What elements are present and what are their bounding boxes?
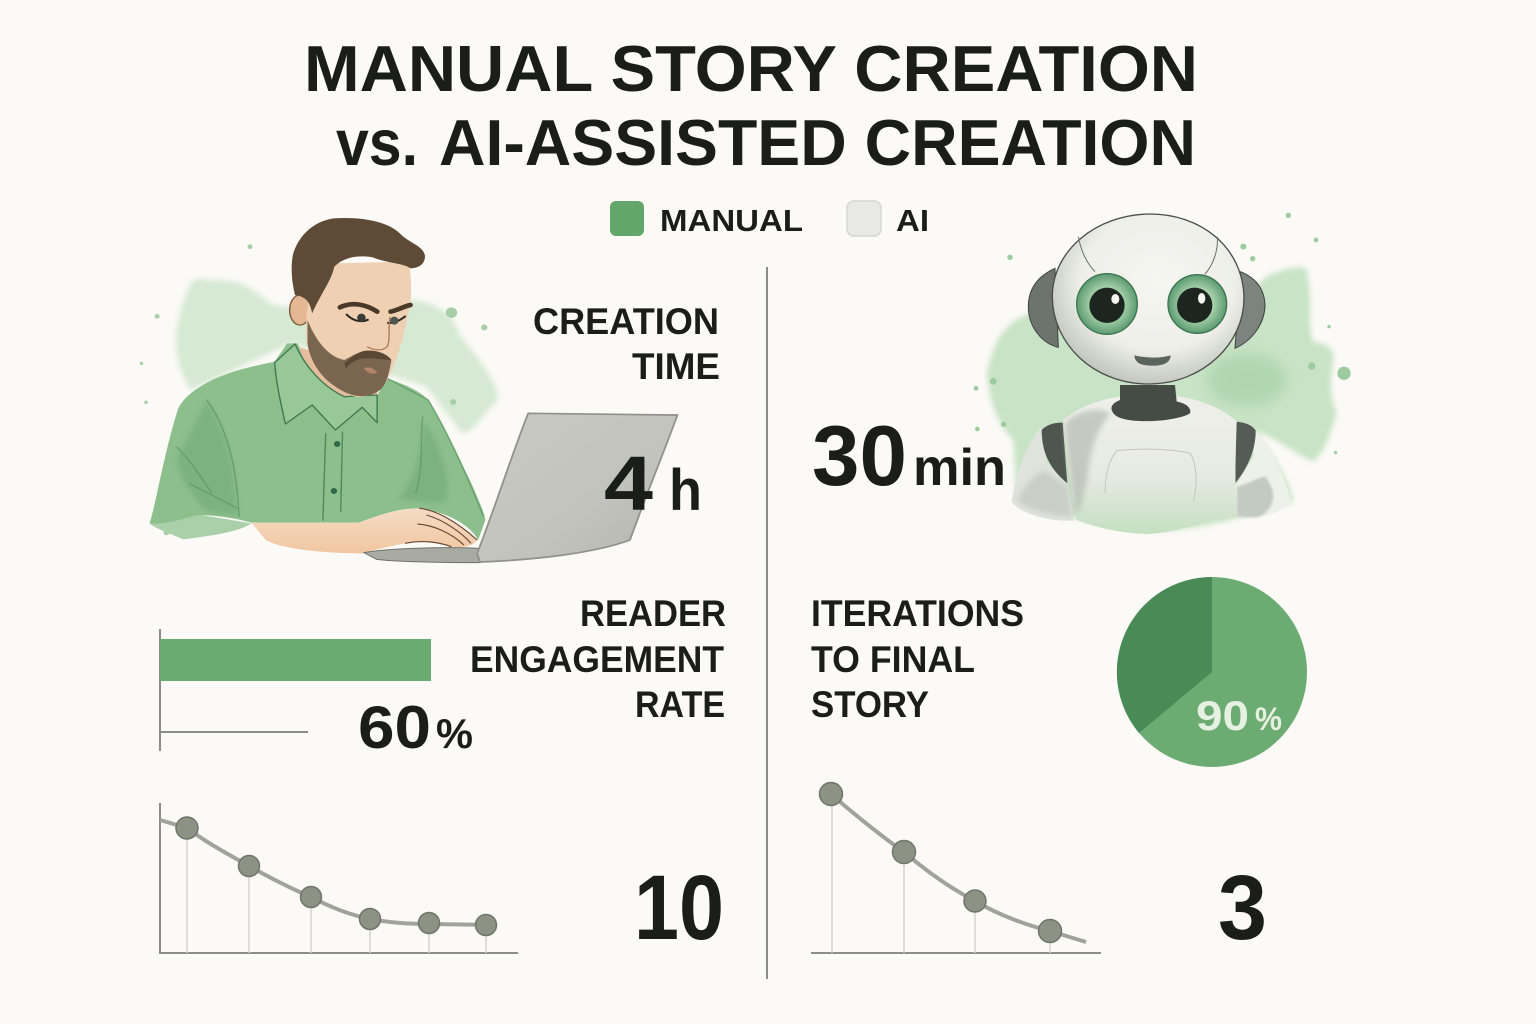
ear — [290, 295, 310, 325]
value: 30 min — [812, 409, 1006, 504]
shirt shading — [176, 400, 448, 517]
value: 60% — [358, 694, 473, 761]
axis — [159, 629, 161, 751]
label: iterations to final story — [811, 593, 1024, 725]
beard — [307, 320, 391, 396]
value: 60%: % — [436, 710, 473, 757]
right arm shading — [1237, 477, 1273, 517]
pie chart: 90%: % — [1255, 701, 1282, 737]
right arm — [1235, 430, 1292, 518]
legend label: AI: AI — [896, 203, 929, 238]
label: iterations to final story: ITERATIONS — [811, 593, 1024, 634]
laptop base — [364, 548, 480, 563]
label: reader engagement rate — [470, 593, 726, 725]
label: reader engagement rate: ENGAGEMENT — [470, 639, 724, 680]
title — [304, 32, 1198, 179]
bar chart: engagement — [159, 629, 431, 751]
value: 60%: 60 — [358, 694, 431, 761]
right shoulder joint — [1235, 422, 1256, 483]
mouth — [1134, 355, 1171, 366]
torso — [1063, 397, 1237, 534]
value: 3: 3 — [1218, 857, 1267, 959]
paint specks — [140, 244, 487, 535]
finger lines — [405, 508, 477, 547]
collar — [275, 344, 377, 430]
left eye — [1077, 274, 1137, 334]
legend swatch: AI — [847, 201, 881, 236]
darker wash — [1207, 353, 1287, 407]
line chart: AI iterations — [811, 782, 1101, 953]
torso shading — [1065, 410, 1110, 517]
label: creation time: CREATION — [533, 301, 719, 342]
chest panel — [1105, 449, 1196, 502]
line chart: manual iterations — [159, 803, 518, 954]
neck — [298, 347, 380, 433]
head — [1052, 214, 1244, 384]
center divider — [766, 267, 768, 979]
value: 4 h: 4 — [604, 441, 653, 527]
neck — [1111, 385, 1190, 421]
left arm shading — [1017, 470, 1072, 517]
title: vs. — [336, 106, 418, 179]
laptop screen — [477, 413, 677, 562]
placket and buttons — [323, 432, 342, 521]
illustration: man at laptop — [140, 218, 677, 563]
label: reader engagement rate: READER — [580, 593, 726, 634]
eyes — [346, 314, 406, 323]
value: 4 h: h — [669, 458, 702, 523]
value: 10: 10 — [634, 857, 724, 959]
mustache — [344, 351, 391, 368]
left ear pad — [1028, 268, 1058, 347]
label: creation time — [533, 301, 720, 387]
brows — [340, 304, 410, 312]
label: reader engagement rate: RATE — [635, 684, 725, 725]
shirt stain — [150, 512, 251, 539]
right ear pad — [1235, 272, 1265, 348]
pie chart: 90% — [1117, 577, 1307, 767]
legend label: manual: MANUAL — [660, 203, 803, 238]
watercolor wash — [176, 278, 498, 433]
label: creation time: TIME — [632, 346, 720, 387]
head seams — [1078, 237, 1217, 274]
value: 30 min: min — [913, 439, 1006, 497]
value: 4 h — [604, 441, 702, 527]
illustration: robot — [974, 213, 1351, 534]
label: iterations to final story: TO FINAL — [811, 639, 975, 680]
watercolor wash — [987, 267, 1337, 531]
left shoulder joint — [1042, 423, 1067, 483]
pie chart: 90%: 90 — [1196, 692, 1249, 739]
title: AI-ASSISTED CREATION — [439, 106, 1196, 179]
title: MANUAL STORY CREATION — [304, 32, 1198, 105]
forearm and hand — [251, 508, 477, 553]
hair — [292, 218, 425, 313]
paint specks — [974, 213, 1351, 454]
shirt — [150, 343, 485, 540]
label: iterations to final story: STORY — [811, 684, 929, 725]
left arm — [1012, 427, 1074, 521]
right eye — [1168, 275, 1227, 333]
nose — [367, 317, 390, 350]
value: 30 min: 30 — [812, 409, 907, 504]
bar: manual — [160, 639, 431, 681]
face — [306, 262, 411, 397]
bar: AI — [160, 731, 308, 733]
legend swatch: manual — [610, 201, 644, 236]
shirt fold lines — [176, 378, 484, 517]
lower lip — [364, 367, 377, 374]
legend — [610, 201, 929, 238]
